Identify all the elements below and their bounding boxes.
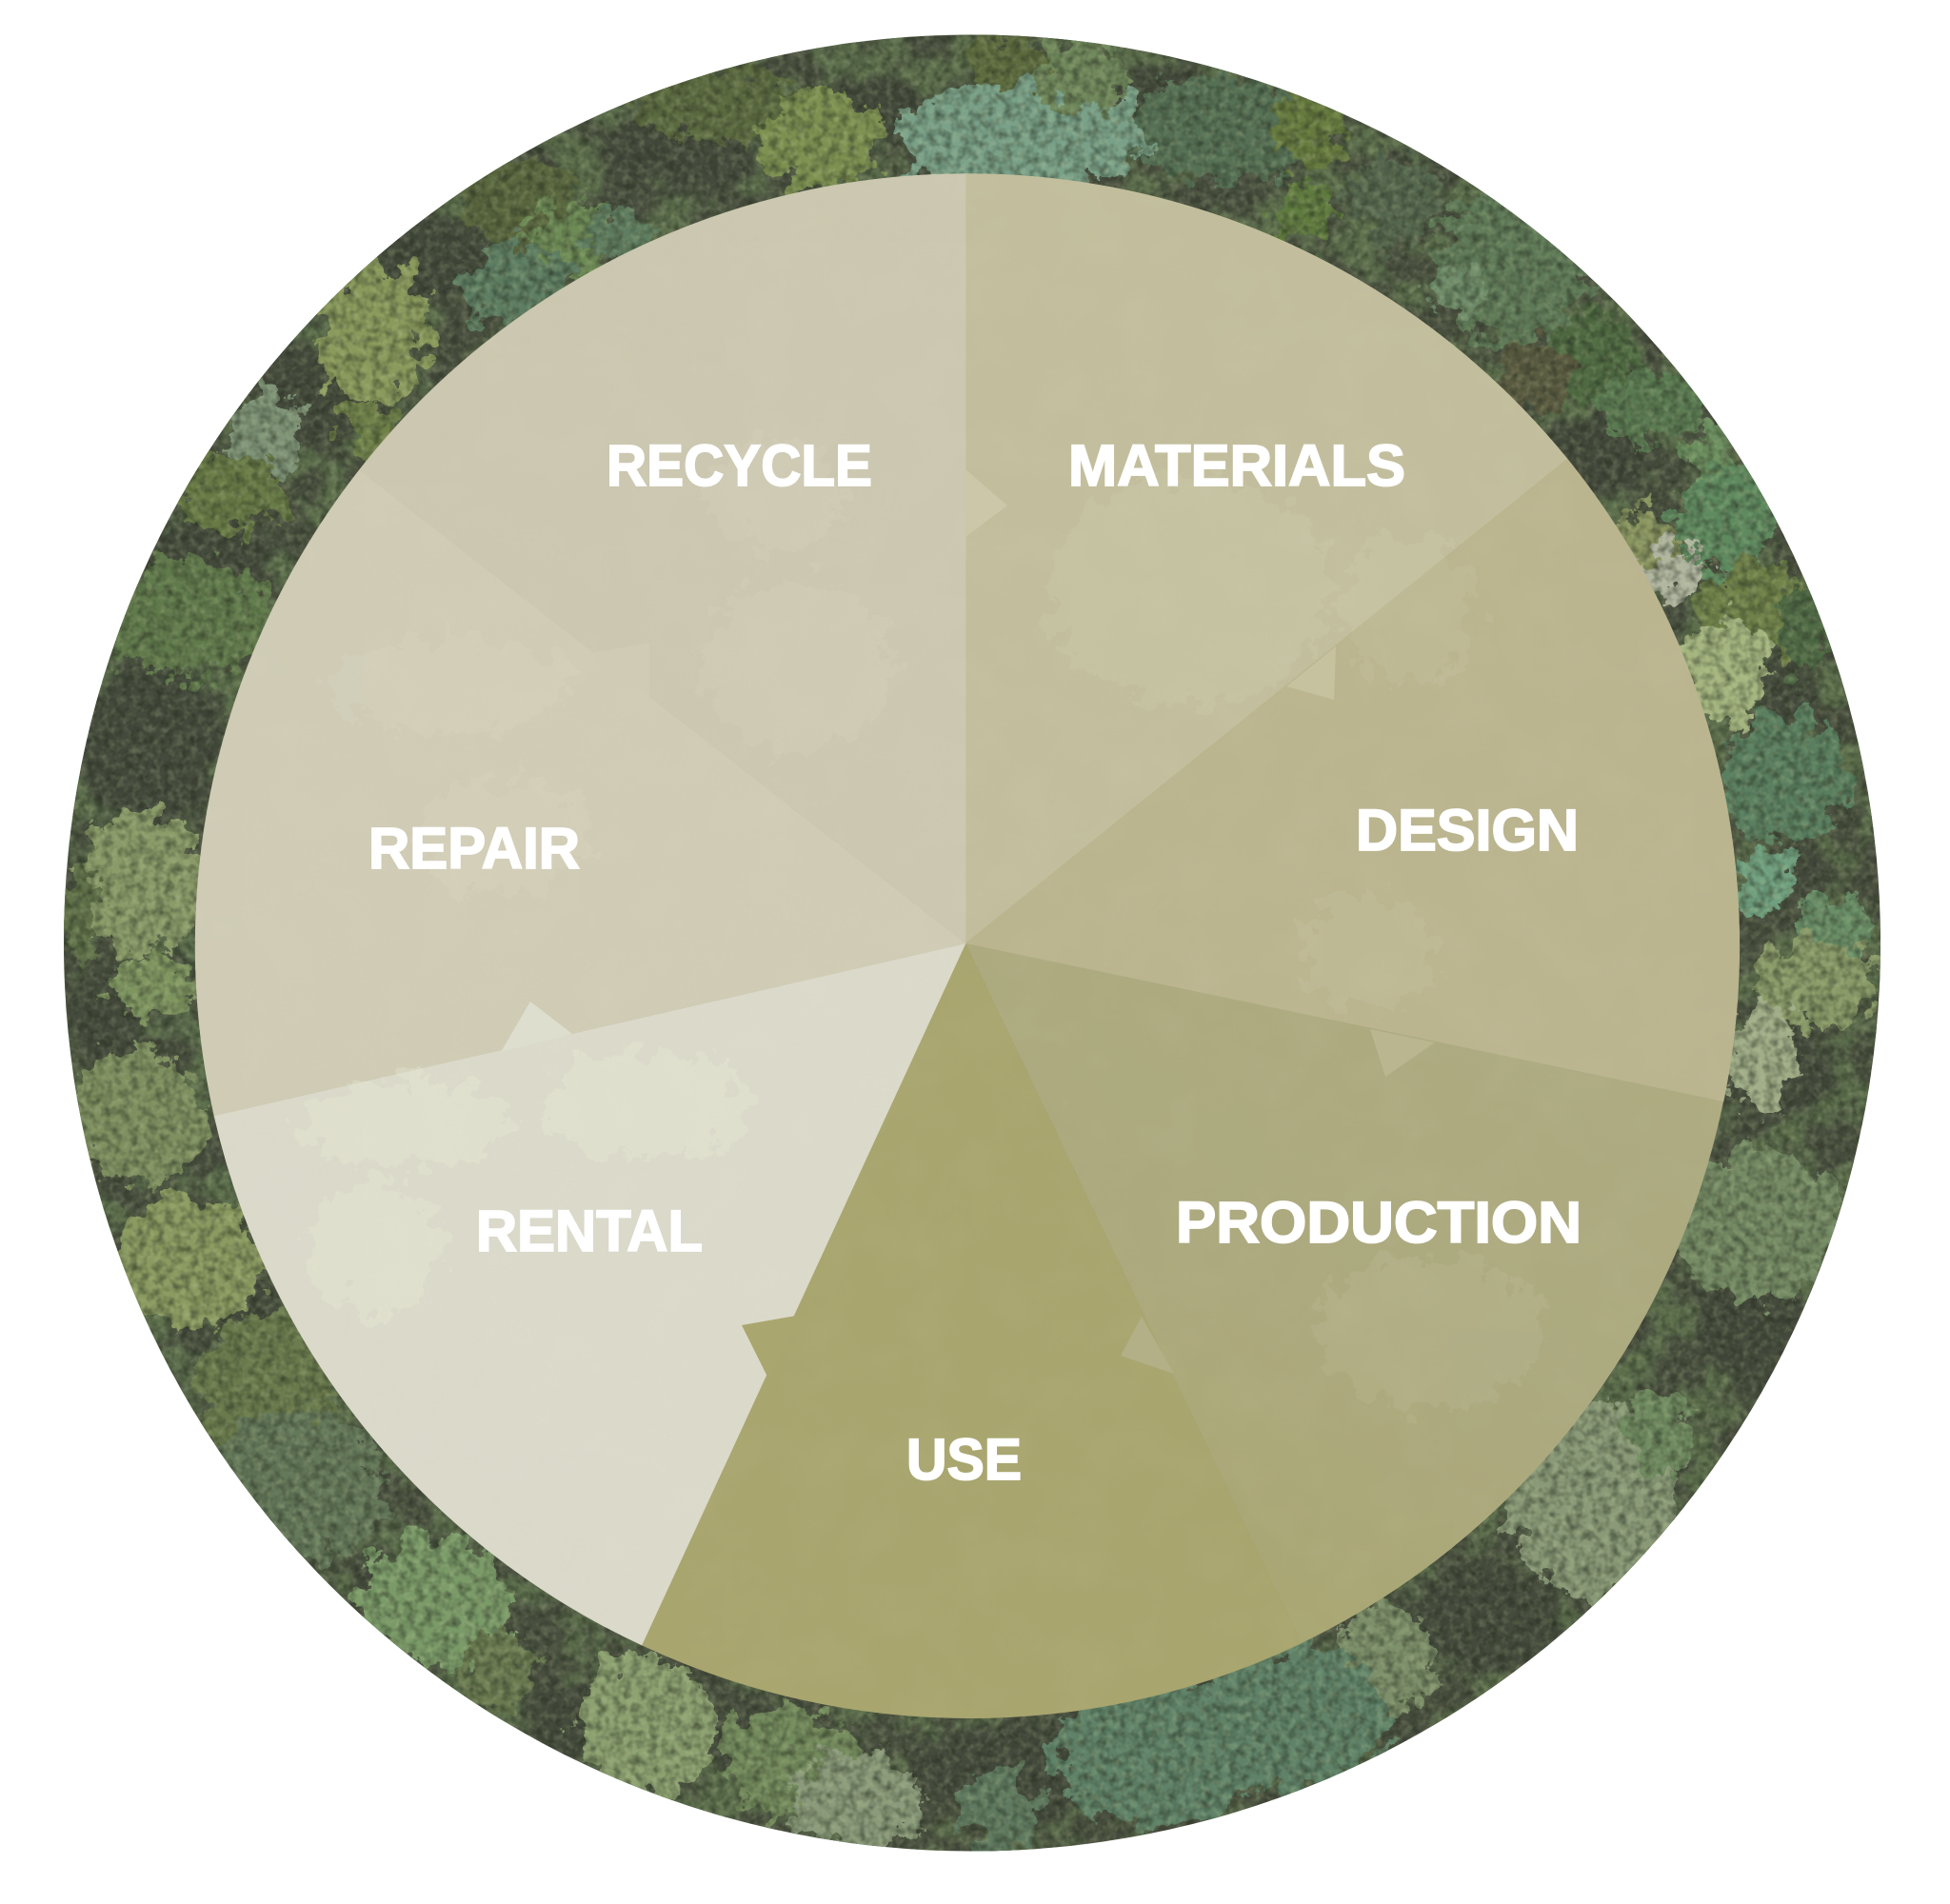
segment: use xyxy=(642,943,1302,1718)
label: rental: RENTAL xyxy=(476,1199,703,1263)
label: materials: MATERIALS xyxy=(1068,433,1405,498)
segment: repair xyxy=(195,470,965,1116)
arrow: recycle to materials xyxy=(965,469,1007,537)
arrow: materials to design xyxy=(1286,646,1336,700)
label: production: PRODUCTION xyxy=(1176,1190,1582,1255)
panel: lifecycle pie wheel xyxy=(190,171,1742,1723)
arrow: repair to recycle xyxy=(590,643,649,698)
label: use: USE xyxy=(906,1427,1022,1492)
segment: production xyxy=(965,943,1723,1643)
arrow: design to production xyxy=(1370,1029,1435,1077)
segment: design xyxy=(965,459,1740,1101)
segment: rental xyxy=(214,943,965,1645)
label: design: DESIGN xyxy=(1356,798,1579,863)
arrow: use to rental xyxy=(742,1315,802,1380)
segment: materials xyxy=(965,173,1567,943)
segment: recycle xyxy=(360,173,965,943)
arrow: production to use xyxy=(1121,1317,1174,1374)
arrow: rental to repair xyxy=(501,1002,572,1052)
label: repair: REPAIR xyxy=(368,816,580,881)
label: recycle: RECYCLE xyxy=(607,433,872,498)
faint tree texture over the wheel xyxy=(347,609,1526,1422)
